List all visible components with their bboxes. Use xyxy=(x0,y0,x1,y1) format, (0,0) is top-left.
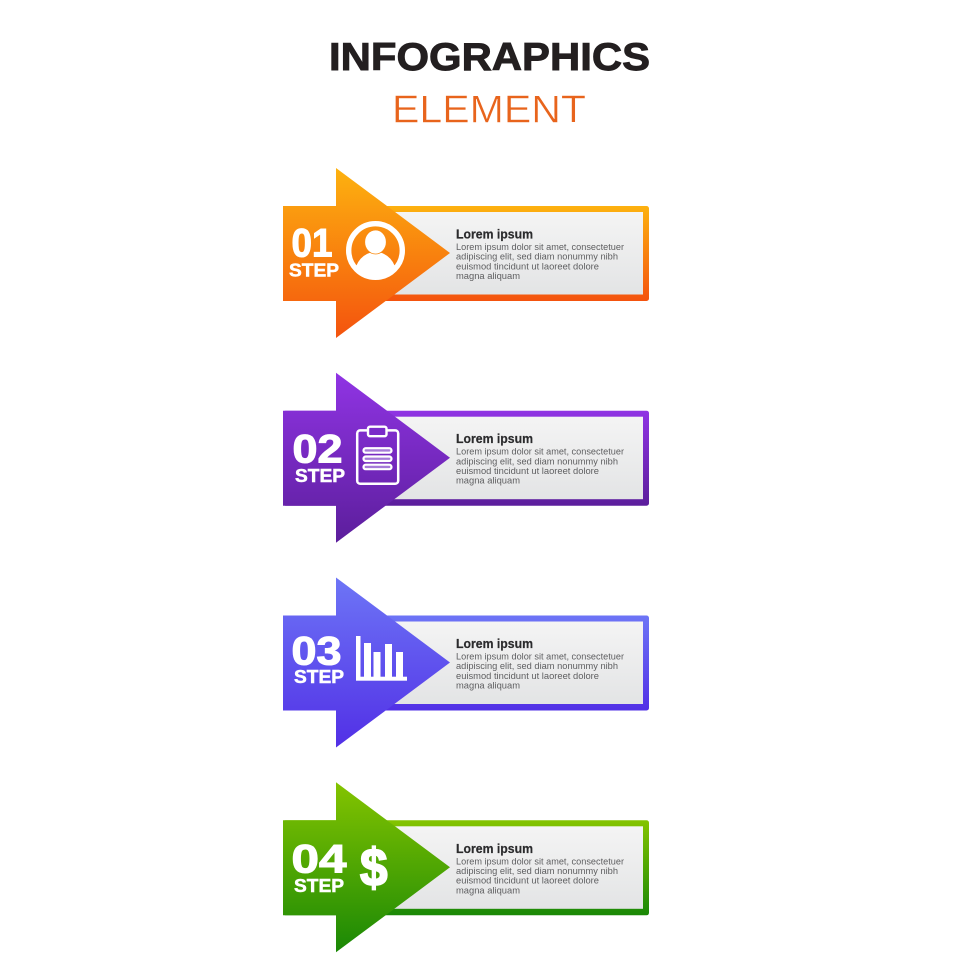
step 1 heading: Lorem ipsum xyxy=(456,228,533,242)
step 3 panel xyxy=(283,578,649,748)
subtitle: ELEMENT xyxy=(392,89,586,132)
title: INFOGRAPHICS xyxy=(329,36,650,79)
step 4 text background xyxy=(380,826,643,909)
step 4 label: STEP xyxy=(294,876,344,896)
step 3 body text: euismod tincidunt ut laoreet dolore xyxy=(456,671,599,682)
step 2 body text: Lorem ipsum dolor sit amet, consectetuer xyxy=(456,447,625,458)
icon: bar chart xyxy=(356,636,407,681)
step 1 body text: adipiscing elit, sed diam nonummy nibh xyxy=(456,252,618,263)
step 1 arrow xyxy=(283,168,450,338)
step 3 heading: Lorem ipsum xyxy=(456,637,533,651)
step 1 number: 01 xyxy=(292,222,332,266)
step 4 body text: magna aliquam xyxy=(456,885,520,896)
step 2 frame xyxy=(283,411,649,506)
step 1 label: STEP xyxy=(289,260,339,280)
step 3 frame xyxy=(283,616,649,710)
step 4 frame xyxy=(283,820,649,915)
step 1 body text: euismod tincidunt ut laoreet dolore xyxy=(456,261,599,272)
step 3 number: 03 xyxy=(292,630,342,674)
step 4 heading: Lorem ipsum xyxy=(456,842,533,856)
step 3 label: STEP xyxy=(294,667,344,687)
icon: dollar sign: $ xyxy=(360,838,388,898)
icon: person xyxy=(346,221,405,280)
step 3 body text: Lorem ipsum dolor sit amet, consectetuer xyxy=(456,652,625,662)
step 4 body text: adipiscing elit, sed diam nonummy nibh xyxy=(456,866,618,877)
step 4 body text xyxy=(456,856,625,896)
step 2 body text: euismod tincidunt ut laoreet dolore xyxy=(456,466,599,477)
step 2 arrow xyxy=(283,373,450,543)
step 2 heading: Lorem ipsum xyxy=(456,432,533,446)
step 1 frame xyxy=(283,206,649,301)
step 3 body text: magna aliquam xyxy=(456,680,520,692)
step 2 body text: magna aliquam xyxy=(456,476,520,487)
icon: clipboard xyxy=(357,427,398,484)
step 1 body text: Lorem ipsum dolor sit amet, consectetuer xyxy=(456,242,625,253)
step 3 arrow xyxy=(283,578,450,748)
step 2 body text: adipiscing elit, sed diam nonummy nibh xyxy=(456,456,618,467)
step 3 body text xyxy=(456,652,625,692)
step 2 label: STEP xyxy=(295,466,345,486)
step 2 number: 02 xyxy=(292,428,342,472)
step 4 number: 04 xyxy=(292,838,347,882)
step 3 text background xyxy=(380,622,643,704)
step 4 arrow xyxy=(283,782,450,952)
step 4 body text: Lorem ipsum dolor sit amet, consectetuer xyxy=(456,856,625,867)
step 4 body text: euismod tincidunt ut laoreet dolore xyxy=(456,876,599,887)
step 2 text background xyxy=(380,417,643,499)
step 1 body text xyxy=(456,242,625,282)
step 2 body text xyxy=(456,447,625,487)
step 2 panel xyxy=(283,373,649,543)
step 1 text background xyxy=(380,212,643,294)
step 3 body text: adipiscing elit, sed diam nonummy nibh xyxy=(456,661,618,672)
step 1 panel xyxy=(283,168,649,338)
step 4 panel xyxy=(283,782,649,952)
step 1 body text: magna aliquam xyxy=(456,271,520,282)
